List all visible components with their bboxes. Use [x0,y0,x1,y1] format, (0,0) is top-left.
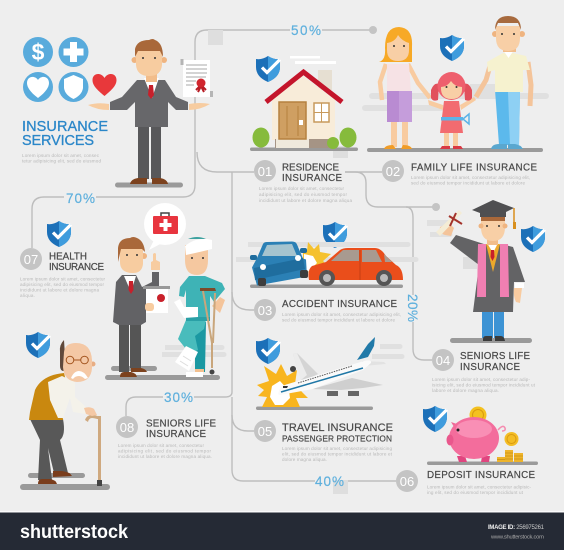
agent figure [113,237,170,377]
body text: Lorem ipsum dolor sit amet, consectetur adipisicing elit, [411,175,530,180]
body text: incididunt ut labore et dolore magna aliqua [259,198,352,203]
body text: sed do eiusmod tempor incididunt ut labore et dolore [282,318,395,322]
image id: IMAGE ID: 256975261 [488,525,545,531]
shutterstock logo text: shutterstock [20,522,128,543]
body text: Lorem ipsum dolor sit amet, consectetur adipisicing elit, [282,312,401,317]
illustration: graduate [427,200,532,343]
connector lines [32,30,436,481]
label: 20 percent: 20% [405,294,420,322]
intro text: tetur adipisicing elit, sed do eiusmod [22,158,101,164]
footer bar [0,511,564,550]
step number 08 [116,416,138,438]
body text: adipisicing elit, sed do eiusmod tempor [118,448,211,454]
heading: DEPOSIT INSURANCE [427,470,535,481]
panel: insurance services title block [22,37,108,164]
icon: badge shield circle [58,72,88,102]
body text: ing elit, sed do eiusmod tempor incididunt ut [427,490,524,495]
step number 02 [382,160,404,182]
blue car [250,242,308,286]
icon: shield [440,35,464,61]
icon: medical cross circle [58,37,88,67]
watermark marks [208,30,477,494]
body text: incididunt ut labore et dolore magna [20,288,99,292]
body text: Lorem ipsum dolor sit amet, consectetur adipisicing [282,446,392,451]
body text: labore et dolore magna aliqua. [432,388,499,393]
body text: elit, sed do eiusmod tempor incididunt ut labore et [282,452,393,456]
daughter [428,72,476,149]
intro text: Lorem ipsum dolor sit amet, consec [22,153,100,158]
panel: 01 residence insurance [250,56,358,203]
icon: heart [92,74,116,96]
step number 01: 01 [258,164,272,179]
icon: shield [256,56,280,82]
illustration: agent and injured patient [105,203,226,380]
body text: dolore magna aliqua. [282,457,327,462]
connector end dots [369,26,440,211]
illustration: airplane and explosion [256,337,404,410]
heading [146,418,216,440]
heading: PASSENGER PROTECTION [282,434,392,444]
patient figure [174,237,225,377]
panel: 08 seniors life insurance [20,332,216,490]
step number 05: 05 [258,424,272,439]
body text: Lorem ipsum dolor sit amet, consectetur [118,443,204,448]
plane fuselage [278,360,371,395]
heading: ACCIDENT INSURANCE [282,299,397,310]
heading: SENIORS LIFE [146,418,216,430]
heading [282,422,393,444]
explosion burst [257,364,308,407]
heading: RESIDENCE [282,162,339,174]
illustration: businessman with heart and document [88,39,213,188]
step number 07 [20,248,42,270]
step number 02: 02 [386,164,400,179]
title: INSURANCE [22,119,108,135]
heading: SENIORS LIFE [460,351,530,362]
label: 30 percent: 30% [164,390,193,405]
panel: 05 travel insurance [254,337,404,462]
panel: 07 health insurance [20,203,226,380]
step number 06: 06 [400,474,414,489]
step number 05 [254,420,276,442]
panel: 03 accident insurance [236,222,419,322]
panel: 04 seniors life insurance [427,200,545,393]
step number 03 [254,299,276,321]
title: SERVICES [22,133,94,149]
intro text [22,153,101,164]
businessman figure [88,39,210,184]
heading [460,351,530,373]
title [22,119,108,149]
body text: incididunt ut labore et dolore magna aliqua. [118,454,212,459]
body text [427,484,531,495]
label: 50 percent: 50% [291,23,321,38]
step number 04 [432,349,454,371]
body text [259,186,352,203]
panel: 02 family life insurance [362,16,549,186]
body text [411,175,530,186]
icon: heart circle [23,72,53,102]
body text [282,312,401,322]
icon: shield [323,222,347,248]
illustration: car crash [236,242,419,288]
icon: shield [47,221,71,247]
body text: isicing elit, sed do eiusmod tempor incididunt ut [432,382,536,388]
body text: Lorem ipsum dolor sit amet, consectetur adipisic- [427,484,531,490]
father [476,16,531,149]
heading [49,252,104,273]
illustration: piggy bank with coins [427,406,538,465]
body text [118,443,212,459]
label: 40 percent: 40% [315,474,344,489]
orange car [308,248,403,286]
illustration: family [362,16,549,152]
body text: Lorem ipsum dolor sit amet, consectetur [20,276,105,282]
speech bubble with medical kit [144,203,186,250]
step number 07: 07 [24,252,38,267]
body text: sed do eiusmod tempor incididunt ut labore et dolore [411,180,525,186]
step number 04: 04 [436,353,450,368]
heading: FAMILY LIFE INSURANCE [411,162,537,174]
heading: INSURANCE [146,429,206,440]
step number 06 [396,470,418,492]
heading: INSURANCE [460,362,520,373]
body text [282,446,393,462]
icon: certificate document [180,59,213,97]
step number 03: 03 [258,303,272,318]
heading: INSURANCE [49,262,104,273]
illustration: house [250,56,358,151]
body text [432,377,536,393]
icon: shield [423,406,447,432]
mother [379,27,430,149]
step number 08: 08 [120,420,134,435]
body text: Lorem ipsum dolor sit amet, consectetur [259,186,344,191]
label: 70 percent: 70% [66,191,95,206]
icon: dollar circle: $ [32,39,45,65]
body text: aliqua. [20,293,35,298]
icon: shield [26,332,50,358]
heading: INSURANCE [282,173,342,184]
website: www.shutterstock.com [490,534,544,540]
plane wings and tail [293,353,318,382]
icon: shield [256,338,280,364]
heading [282,162,342,184]
icon: shield [521,226,545,252]
step number 01 [254,160,276,182]
body text: Lorem ipsum dolor sit amet, consectetur adip- [432,377,530,382]
panel: 06 deposit insurance [396,406,538,495]
body text: adipisicing elit, sed do eiusmod tempor [259,192,347,197]
body text: adipisicing elit, sed do eiusmod tempor [20,282,104,287]
body text [20,276,105,298]
illustration: senior man with cane [20,340,110,490]
burst [303,242,331,273]
heading: HEALTH [49,252,87,262]
heading: TRAVEL INSURANCE [282,422,393,434]
